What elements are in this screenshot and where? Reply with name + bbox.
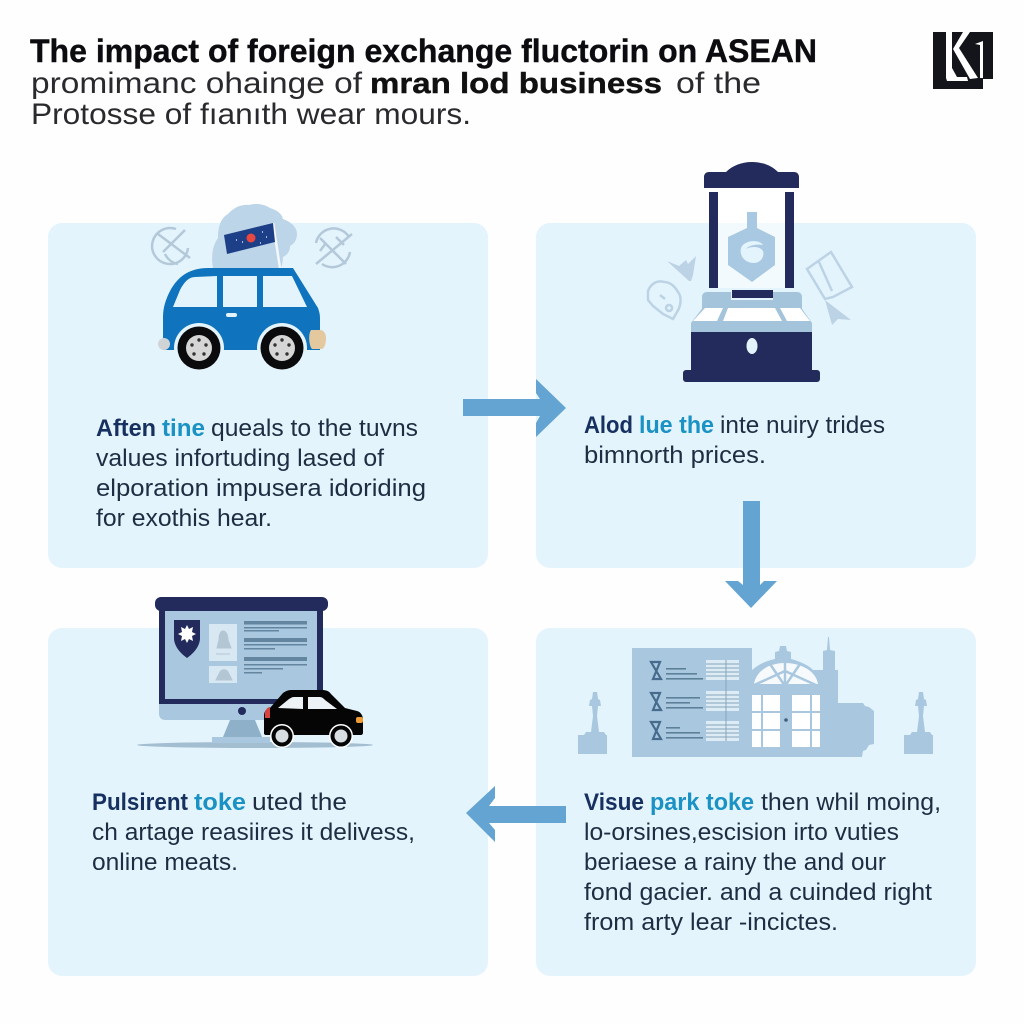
table rows <box>651 660 739 741</box>
left statue <box>578 692 607 754</box>
panel: bottom left <box>48 597 488 976</box>
subtitle line: of the <box>676 67 761 100</box>
screen text bars <box>244 621 307 674</box>
text: panel 2: inte nuiry trides <box>720 412 885 439</box>
subtitle line: promimanc ohainge of <box>31 67 363 100</box>
text: panel 3: online meats. <box>92 849 238 876</box>
icon: car with flag <box>152 204 352 373</box>
text: panel 3: uted the <box>252 789 347 816</box>
flag <box>224 223 280 268</box>
title block <box>30 33 817 131</box>
text: panel 2: Alod <box>584 412 633 439</box>
text: panel 4: lo-orsines,escision irto vuties <box>584 819 899 846</box>
monitor shadow <box>137 742 373 748</box>
text: panel 1: queals to the tuvns <box>211 415 418 442</box>
text: panel 1: values infortuding lased of <box>96 445 384 472</box>
text: panel 3 <box>92 789 415 876</box>
text: panel 1: tine <box>162 415 205 442</box>
icon: display case machine <box>648 162 852 382</box>
text: panel 3: Pulsirent <box>92 789 188 816</box>
text: panel 4 <box>584 789 941 936</box>
title line: The impact of foreign exchange fluctorin on ASEAN <box>30 33 817 69</box>
arrow: down <box>725 501 777 608</box>
text: panel 2 <box>584 412 885 469</box>
top cap <box>704 162 799 188</box>
panel: bottom right <box>536 628 976 976</box>
text: panel 3: toke <box>194 789 246 816</box>
subtitle line <box>31 67 761 100</box>
posts <box>709 192 794 288</box>
base body <box>691 332 812 370</box>
icon: chevrons and tags <box>648 252 852 325</box>
text: panel 1: elporation impusera idoriding <box>96 475 426 502</box>
panel: top left <box>48 204 488 568</box>
text: panel 4: from arty lear -incictes. <box>584 909 838 936</box>
text: panel 1: Aften <box>96 415 156 442</box>
black car <box>264 690 363 748</box>
icon: crossed coin left <box>152 228 190 264</box>
shield <box>728 212 775 282</box>
wheels <box>174 323 307 373</box>
arched window <box>754 663 818 684</box>
monitor stand <box>223 720 262 737</box>
text: panel 4: then whil moing, <box>761 789 941 816</box>
shield on screen <box>174 620 200 658</box>
screen <box>165 611 317 699</box>
base tray <box>691 306 812 332</box>
subtitle line: mran lod business <box>370 68 662 100</box>
monitor frame <box>159 605 323 704</box>
arrow: right <box>463 379 566 437</box>
arrow: left <box>466 786 566 842</box>
screen thumbnails <box>209 624 237 683</box>
subtitle second line: Protosse of fıanıth wear mours. <box>31 98 471 131</box>
base top <box>702 292 802 310</box>
text: panel 2: lue the <box>639 412 714 439</box>
monitor chin <box>159 703 323 720</box>
text: panel 4: park toke <box>650 789 754 816</box>
text: panel 3: ch artage reasiires it delivess, <box>92 819 415 846</box>
panel: top right <box>536 162 976 568</box>
icon: monitor with car <box>137 597 373 748</box>
headlights <box>158 338 170 350</box>
icon: crossed coin right <box>316 228 352 267</box>
text: panel 1 <box>96 415 426 532</box>
doors <box>752 695 820 747</box>
text: panel 4: fond gacier. and a cuinded right <box>584 879 932 906</box>
text: panel 1: for exothis hear. <box>96 505 272 532</box>
icon: building with statues <box>578 637 933 757</box>
logo <box>933 32 993 89</box>
smoke cloud <box>212 204 297 268</box>
building silhouette <box>632 637 874 757</box>
text: panel 4: beriaese a rainy the and our <box>584 849 886 876</box>
right statue <box>904 692 933 754</box>
text: panel 4: Visue <box>584 789 644 816</box>
car body <box>163 268 320 350</box>
text: panel 2: bimnorth prices. <box>584 442 766 469</box>
glass <box>718 192 785 288</box>
